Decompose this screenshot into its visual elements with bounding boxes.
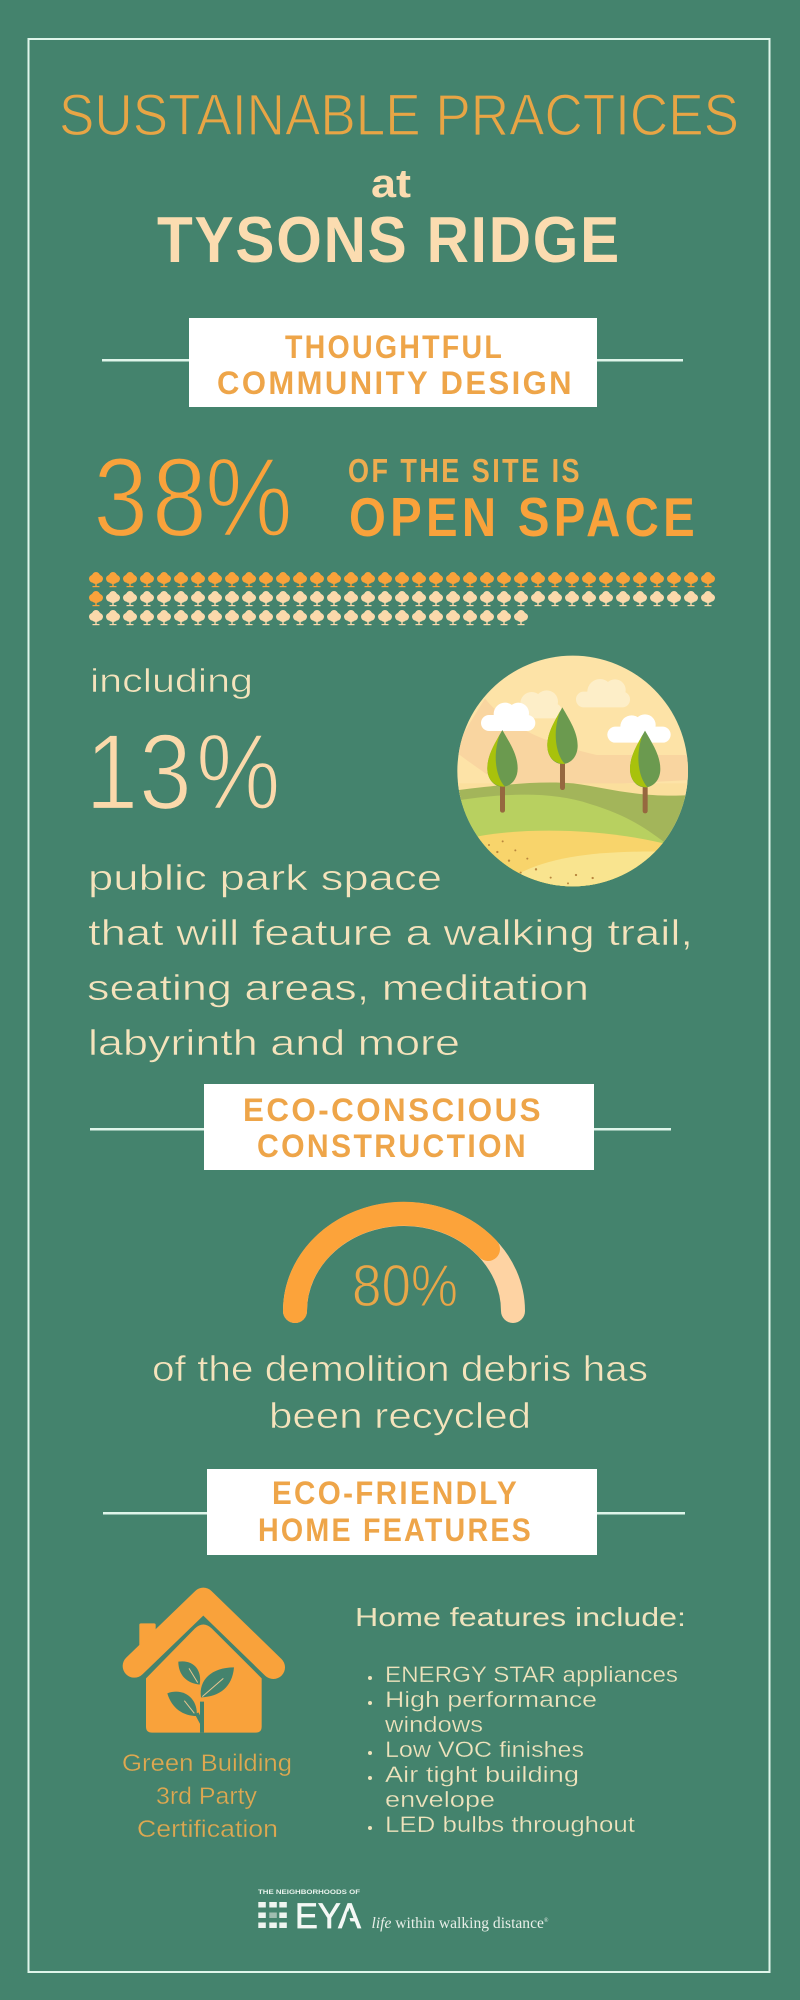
logo: EYA	[258, 1889, 549, 1936]
logo A notch	[342, 1911, 352, 1928]
trees	[487, 707, 660, 813]
list: home features	[368, 1662, 678, 1837]
logo: EYA: ®	[544, 1917, 549, 1924]
big number 13%: 13%	[85, 711, 280, 832]
list: home features: envelope	[385, 1787, 495, 1812]
field dots	[488, 840, 594, 884]
title line: at: at	[371, 162, 411, 206]
big number 38%: 38%	[93, 436, 293, 560]
pale field	[520, 852, 656, 886]
text: park space description	[87, 857, 693, 1063]
section heading: thoughtful community design	[102, 318, 683, 407]
label: open space: OPEN SPACE	[349, 486, 699, 548]
tree pictogram: 38 of 100 trees highlighted	[89, 572, 715, 625]
section heading: thoughtful community design: THOUGHTFUL	[285, 329, 504, 365]
white clouds	[481, 703, 671, 743]
list: home features: Air tight building	[385, 1762, 579, 1787]
logo: EYA: THE NEIGHBORHOODS OF	[258, 1889, 360, 1896]
text: park space description: that will feature a walking trail,	[88, 912, 693, 953]
light green hill	[461, 794, 664, 886]
text: green building certification	[122, 1750, 292, 1843]
label: of the site is: OF THE SITE IS	[348, 452, 582, 489]
text: green building certification: Certification	[137, 1816, 278, 1843]
text: green building certification: Green Building	[122, 1750, 292, 1777]
section heading: eco-conscious construction: ECO-CONSCIOUS	[243, 1092, 543, 1128]
logo: EYA: EYA	[295, 1897, 362, 1936]
gauge chart: 80 percent	[295, 1214, 513, 1319]
list: home features: High performance	[385, 1687, 597, 1712]
distant peach hills	[453, 698, 690, 787]
text: home features heading: Home features include:	[355, 1602, 686, 1632]
text: demolition debris recycled	[152, 1348, 648, 1436]
title line: Tysons Ridge: TYSONS RIDGE	[157, 203, 621, 276]
section heading: eco-friendly home features	[103, 1469, 685, 1555]
text: demolition debris recycled: been recycled	[269, 1395, 531, 1436]
icon: park landscape circle	[457, 656, 688, 886]
logo: EYA: life within walking distance	[372, 1915, 543, 1932]
text: including: including	[90, 662, 253, 699]
text: demolition debris recycled: of the demolition debris has	[152, 1348, 648, 1389]
yellow field	[478, 830, 663, 886]
title line: sustainable practices: SUSTAINABLE PRACTICES	[59, 83, 739, 148]
section heading: eco-friendly home features: HOME FEATURES	[258, 1512, 533, 1548]
logo dots	[258, 1902, 287, 1928]
text: green building certification: 3rd Party	[156, 1783, 257, 1810]
stat: 38 percent open space	[93, 436, 699, 560]
text: park space description: public park space	[88, 857, 442, 898]
text: park space description: labyrinth and more	[88, 1022, 460, 1063]
section heading: eco-conscious construction: CONSTRUCTION	[257, 1128, 528, 1164]
gauge value: 80%	[352, 1253, 458, 1319]
text: park space description: seating areas, meditation	[87, 967, 589, 1008]
list: home features: ENERGY STAR appliances	[385, 1662, 678, 1687]
list: home features: windows	[384, 1712, 483, 1737]
section heading: eco-conscious construction	[90, 1084, 671, 1170]
section heading: thoughtful community design: COMMUNITY DESIGN	[217, 365, 574, 401]
section heading: eco-friendly home features: ECO-FRIENDLY	[272, 1475, 519, 1511]
title	[59, 83, 739, 276]
faint clouds	[520, 679, 630, 718]
list: home features: Low VOC finishes	[385, 1737, 584, 1762]
icon: green house with plant	[134, 1599, 273, 1733]
dark green hill	[459, 782, 686, 878]
list: home features: LED bulbs throughout	[385, 1812, 635, 1837]
